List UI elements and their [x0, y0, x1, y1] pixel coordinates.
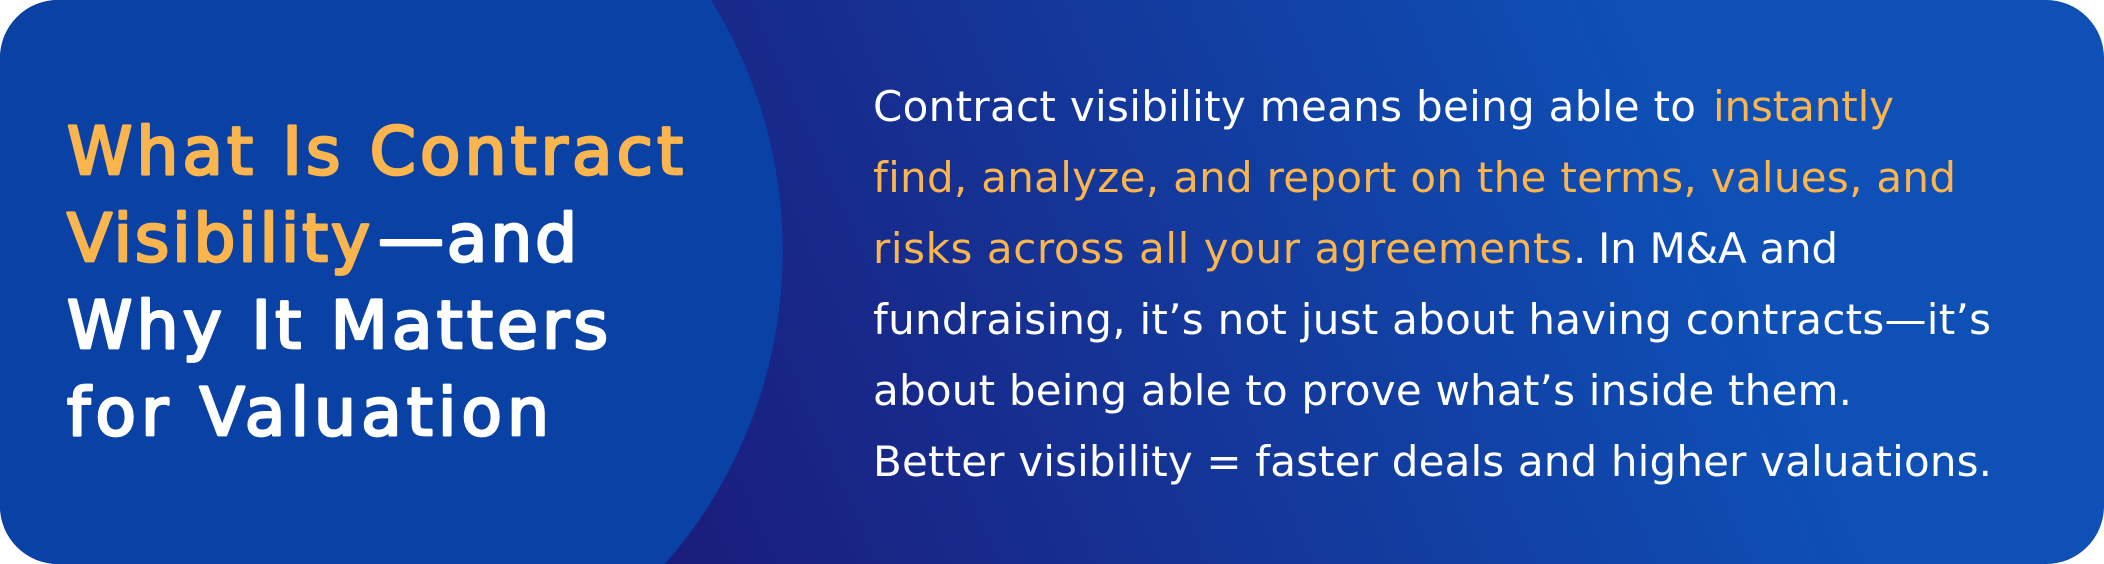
heading: Visibility — [67, 200, 370, 277]
heading: Why It Matters — [67, 287, 608, 364]
text block: definition: find, analyze, and report on the terms, values, and — [873, 153, 1956, 202]
heading: What Is Contract — [67, 113, 683, 190]
heading: —and — [378, 200, 577, 277]
text block: definition — [873, 82, 1992, 486]
heading — [67, 113, 683, 451]
text block: definition: risks across all your agreements — [873, 224, 1572, 273]
text block: definition: fundraising, it’s not just about having contracts—it’s — [873, 295, 1991, 344]
heading: for Valuation — [67, 374, 549, 451]
text block: definition: . — [1573, 224, 1586, 273]
text block: definition: about being able to prove what’s inside them. — [873, 366, 1852, 415]
panel: left circle — [0, 0, 783, 564]
text block: definition: Contract visibility means being able to — [873, 82, 1696, 131]
text block: definition: Better visibility = faster deals and higher valuations. — [873, 437, 1992, 486]
text block: definition: In M&A and — [1598, 224, 1838, 273]
text block: definition: instantly — [1713, 82, 1894, 131]
